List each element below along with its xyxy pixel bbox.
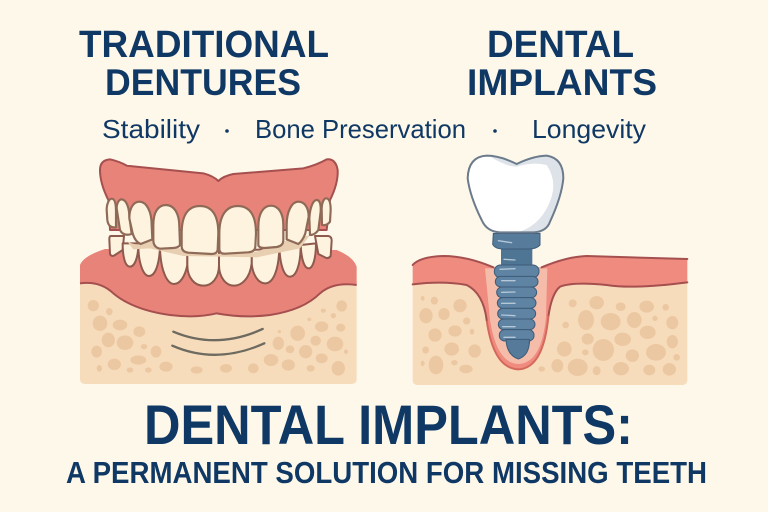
socket (485, 268, 547, 364)
heading: dental implants: DENTAL (487, 24, 634, 66)
heading: dental implants: IMPLANTS (467, 62, 657, 103)
panel: implant illustration (413, 156, 687, 385)
crown outline (468, 156, 563, 232)
nerve lines (172, 329, 264, 355)
heading: traditional dentures: TRADITIONAL (79, 24, 329, 66)
screw core (499, 267, 534, 359)
upper denture base (100, 159, 338, 230)
lower denture teeth (109, 236, 332, 286)
comparison criteria line: Bone Preservation (255, 114, 466, 144)
lower gum edge line (80, 283, 357, 316)
heading: traditional dentures (79, 24, 329, 103)
heading: dental implants (467, 24, 657, 103)
collar highlight (498, 241, 512, 243)
comparison criteria line: Stability (102, 114, 200, 144)
screw tip (506, 339, 529, 359)
subtitle: A PERMANENT SOLUTION FOR MISSING TEETH (66, 455, 707, 490)
gum outlines (413, 256, 687, 369)
gum tissue (413, 256, 687, 369)
comparison criteria line (102, 114, 646, 144)
bone spots (88, 300, 348, 376)
thread highlights (500, 259, 515, 337)
bone block (413, 278, 687, 385)
heading: traditional dentures: DENTURES (105, 62, 301, 103)
comparison criteria line: Longevity (532, 114, 646, 144)
panel: denture illustration (80, 159, 357, 384)
bone spots (419, 296, 680, 376)
collar (493, 233, 540, 249)
crown (468, 156, 563, 232)
main title: DENTAL IMPLANTS: (144, 393, 633, 456)
screw threads (494, 265, 539, 341)
lower gum (80, 249, 357, 316)
bone block (80, 277, 357, 384)
upper denture teeth (107, 198, 331, 254)
crown shading (490, 156, 563, 232)
abutment neck (501, 247, 532, 268)
shade band between arches (127, 235, 310, 257)
implant screw (493, 233, 540, 359)
crown body (468, 156, 563, 232)
